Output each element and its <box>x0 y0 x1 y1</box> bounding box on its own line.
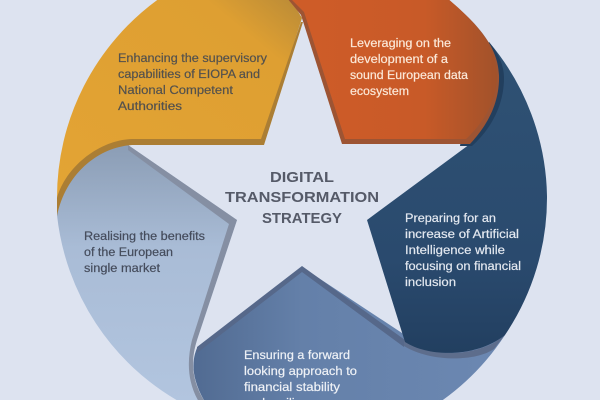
text block: dark blue segment: Preparing for an <box>405 211 496 225</box>
text block: yellow segment: capabilities of EIOPA and <box>118 67 260 81</box>
text block: light blue segment <box>84 229 205 275</box>
text block: orange segment: Leveraging on the <box>350 36 451 50</box>
heading: digital transformation strategy: DIGITAL <box>270 169 334 186</box>
heading: digital transformation strategy <box>225 169 379 227</box>
text block: yellow segment: Enhancing the supervisory <box>118 51 268 65</box>
text block: orange segment: development of a <box>350 52 448 66</box>
heading: digital transformation strategy: TRANSFORMATION <box>225 189 379 206</box>
text block: dark blue segment: focusing on financial <box>405 259 521 273</box>
panel: orange segment <box>287 0 504 146</box>
text block: dark blue segment: Intelligence while <box>405 243 505 257</box>
panel: light blue segment <box>57 145 237 400</box>
panel: yellow segment <box>57 0 303 216</box>
text block: mid blue segment: looking approach to <box>244 364 357 378</box>
text block: yellow segment: Authorities <box>118 99 182 113</box>
text block: orange segment: ecosystem <box>350 84 409 98</box>
text block: orange segment: sound European data <box>350 68 468 82</box>
panel: mid blue segment <box>193 266 505 400</box>
text block: dark blue segment: increase of Artificial <box>405 227 519 241</box>
text block: light blue segment: of the European <box>84 245 173 259</box>
text block: mid blue segment: Ensuring a forward <box>244 348 350 362</box>
panel: dark blue segment <box>367 42 547 353</box>
text block: dark blue segment: inclusion <box>405 275 456 289</box>
text block: yellow segment <box>118 51 268 113</box>
shadow under dark blue segment <box>404 335 505 358</box>
text block: mid blue segment: financial stability <box>244 380 341 394</box>
text block: mid blue segment <box>244 348 357 400</box>
heading: digital transformation strategy: STRATEGY <box>262 210 342 227</box>
text block: dark blue segment <box>405 211 521 289</box>
text block: light blue segment: single market <box>84 261 161 275</box>
text block: yellow segment: National Competent <box>118 83 234 97</box>
text block: orange segment <box>350 36 468 98</box>
text block: light blue segment: Realising the benefits <box>84 229 205 243</box>
